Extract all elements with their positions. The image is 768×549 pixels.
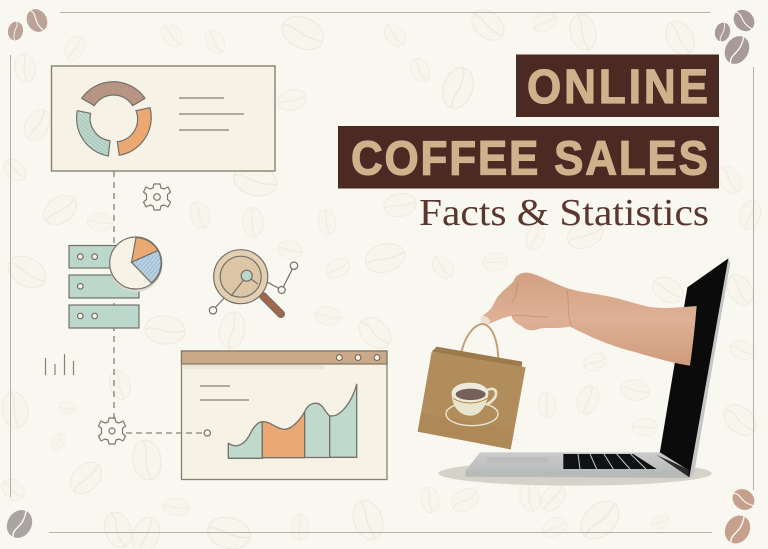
server indicator lights: [78, 254, 97, 319]
panel: browser window with area chart: [182, 351, 387, 480]
icon: coffee beans top left: [6, 5, 51, 42]
server rows: [69, 246, 139, 328]
keyboard: [563, 454, 657, 469]
network nodes: [209, 262, 298, 314]
bag handle: [461, 324, 498, 362]
bag flap: [432, 347, 522, 367]
bag body: [418, 352, 526, 449]
panel: donut chart card: [52, 66, 275, 171]
laptop shadow: [438, 461, 712, 486]
area chart: [228, 384, 357, 458]
donut chart: [77, 82, 151, 156]
shopping bag: [418, 324, 526, 449]
icon: gear upper: [144, 184, 170, 210]
magnifier handle: [263, 296, 281, 314]
icon: magnifier with network: [209, 250, 298, 314]
window buttons: [336, 355, 380, 360]
arm and hand: [481, 273, 697, 366]
icon: coffee bean bottom left: [2, 505, 37, 543]
dashed connector vertical: [113, 171, 115, 420]
icon: coffee beans top right: [713, 6, 759, 68]
laptop base: [466, 452, 689, 478]
panel: server stack with pie chart: [69, 237, 162, 328]
pie chart: [110, 237, 162, 292]
icon: gear lower: [98, 418, 126, 444]
text lines: [200, 386, 249, 400]
legend lines: [179, 98, 244, 130]
window header: [182, 351, 387, 364]
subtitle: Facts & Statistics: [419, 192, 709, 234]
dashed connector horizontal with end node: [126, 430, 210, 436]
coffee cup logo: [446, 383, 498, 426]
magnifier lens: [214, 250, 268, 304]
laptop screen: [657, 258, 730, 477]
illustration: hand and laptop: [418, 258, 730, 486]
title: online: ONLINE: [527, 59, 708, 113]
icon: small bars: [46, 354, 74, 375]
title: coffee sales: COFFEE SALES: [351, 131, 708, 185]
icon: coffee beans bottom right: [720, 485, 759, 548]
network lines: [213, 266, 294, 310]
